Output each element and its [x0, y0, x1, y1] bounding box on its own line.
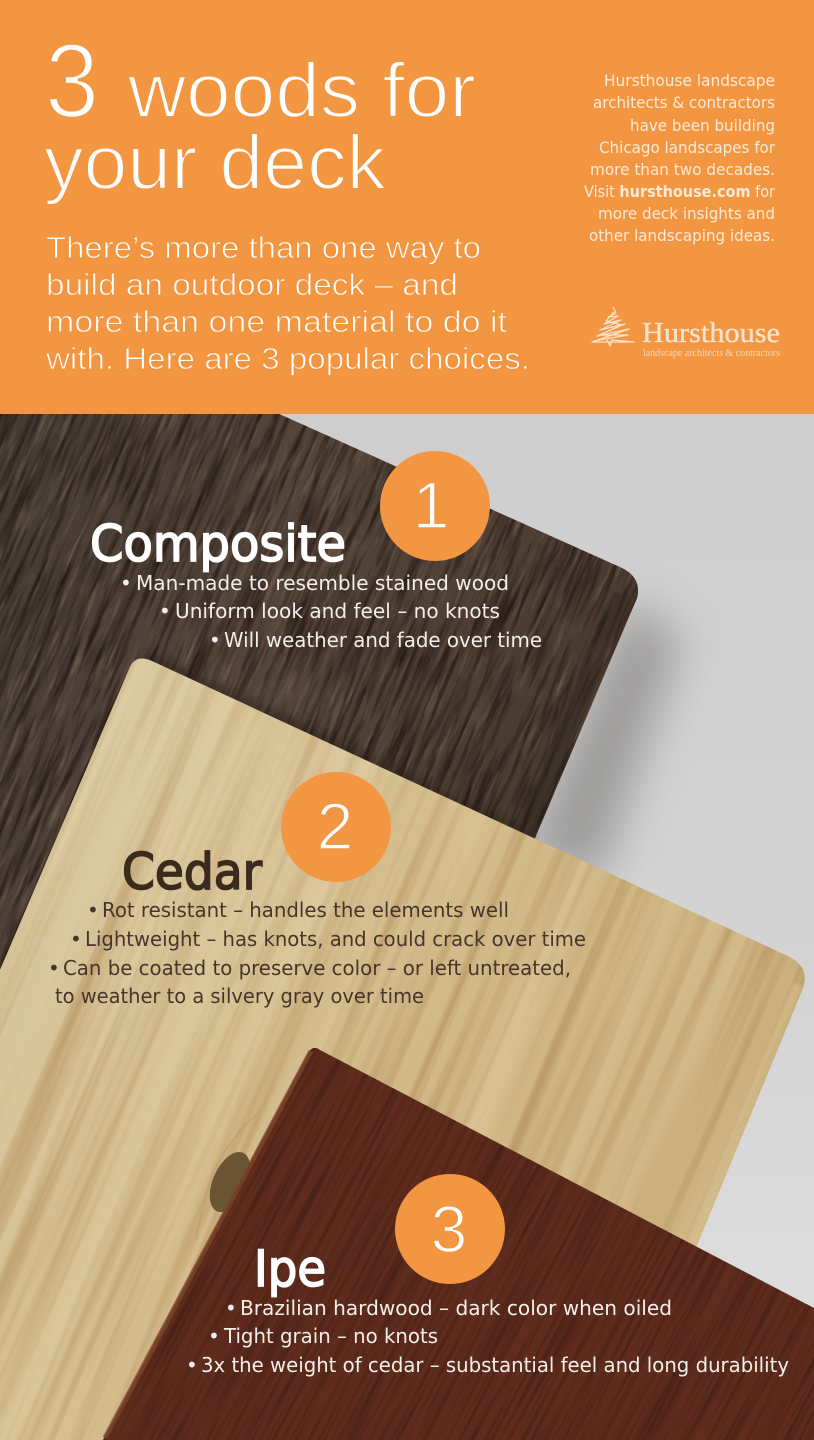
icon: tree logo [592, 307, 634, 346]
Hursthouse logo [592, 307, 780, 359]
number badge 1: 1 [413, 468, 449, 542]
bullets: ipe: Tight grain – no knots [223, 1324, 438, 1348]
composite wood board [0, 413, 638, 990]
Hursthouse logo: Hursthouse [642, 317, 780, 349]
heading: Ipe: Ipe [254, 1240, 326, 1298]
number badge 2 [281, 772, 391, 882]
title [44, 23, 476, 206]
shadow behind composite board [520, 600, 680, 880]
section 1: Composite [90, 451, 542, 652]
bullets: composite: Will weather and fade over time [224, 628, 542, 652]
title: your deck [44, 120, 386, 206]
company blurb: architects & contractors [593, 93, 775, 112]
bullets: composite [120, 571, 542, 652]
bullets: ipe: • [186, 1353, 198, 1377]
intro text: more than one material to do it [46, 304, 507, 339]
title: 3 [45, 23, 99, 140]
number badge 3 [395, 1174, 505, 1284]
title: woods for [127, 48, 476, 134]
section 3: Ipe [186, 1174, 789, 1377]
header panel [0, 0, 814, 414]
intro text: with. Here are 3 popular choices. [45, 341, 530, 376]
number badge 2: 2 [317, 789, 353, 863]
knot in cedar [196, 1115, 259, 1240]
intro text: build an outdoor deck – and [46, 267, 458, 302]
bullets: cedar: • [87, 898, 99, 922]
company blurb: Hursthouse landscape [604, 71, 775, 90]
bullets: cedar: Can be coated to preserve color – or left untreated, [63, 956, 571, 980]
bullets: cedar [48, 898, 586, 1008]
company blurb: Visit hursthouse.com for [584, 182, 775, 201]
bullets: ipe: Brazilian hardwood – dark color when oiled [240, 1296, 672, 1320]
company blurb [584, 71, 775, 245]
bullets: cedar: • [48, 956, 60, 980]
bullets: ipe: • [208, 1324, 220, 1348]
bullets: ipe: 3x the weight of cedar – substantial feel and long durability [201, 1353, 789, 1377]
cedar wood board [0, 659, 805, 1440]
company blurb: other landscaping ideas. [589, 226, 775, 245]
bullets: composite: Uniform look and feel – no knots [175, 599, 500, 623]
heading: Composite: Composite [90, 515, 346, 573]
photo background: grey surface [0, 414, 814, 1440]
Hursthouse logo: landscape architects & contractors [643, 348, 780, 359]
company blurb: Chicago landscapes for [599, 138, 775, 157]
shadow of cedar board on composite [130, 652, 536, 842]
bullets: composite: • [209, 628, 221, 652]
company blurb: more deck insights and [598, 204, 775, 223]
number badge 1 [380, 451, 490, 561]
bullets: composite: Man-made to resemble stained wood [136, 571, 509, 595]
bullets: ipe [186, 1296, 789, 1377]
bullets: cedar: Rot resistant – handles the elements well [102, 898, 509, 922]
section 2: Cedar [48, 772, 586, 1008]
bullets: composite: • [120, 571, 132, 595]
bullets: cedar: to weather to a silvery gray over time [55, 984, 424, 1008]
bullets: ipe: • [225, 1296, 237, 1320]
ipe wood board [103, 1048, 814, 1440]
heading: Cedar: Cedar [122, 843, 262, 901]
company blurb: have been building [630, 116, 775, 135]
intro text [45, 230, 530, 376]
bullets: cedar: Lightweight – has knots, and could crack over time [85, 927, 586, 951]
bullets: composite: • [159, 599, 171, 623]
intro text: There’s more than one way to [46, 230, 481, 265]
company blurb: more than two decades. [590, 160, 775, 179]
bullets: cedar: • [70, 927, 82, 951]
number badge 3: 3 [431, 1192, 467, 1266]
